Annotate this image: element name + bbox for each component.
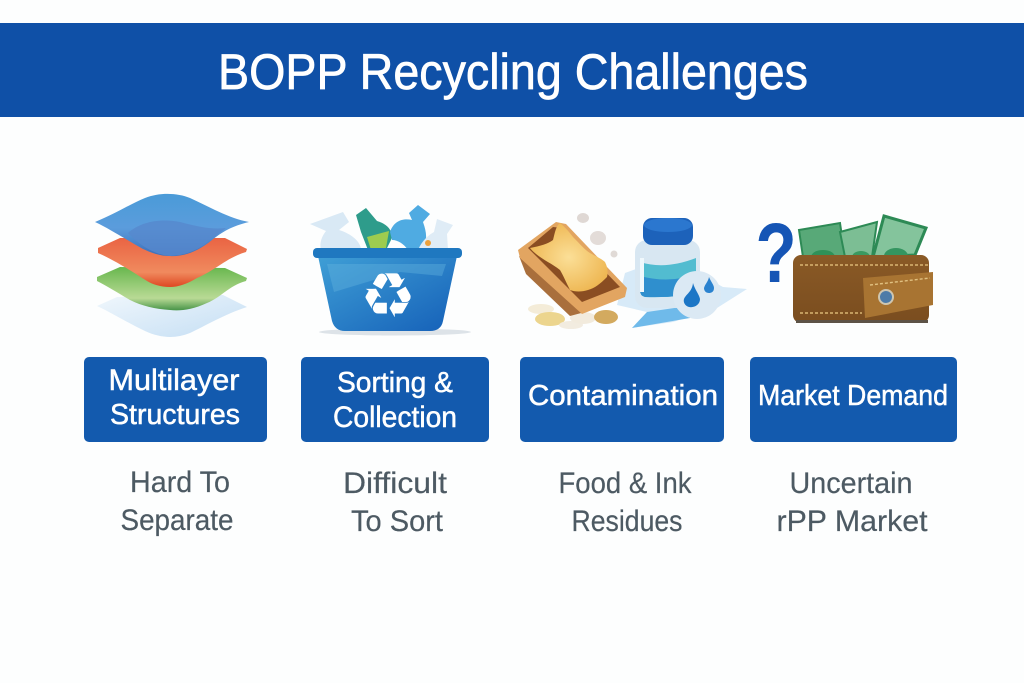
toast side (519, 256, 585, 316)
caption: difficult to sort: To Sort (351, 505, 444, 538)
title banner (0, 23, 1024, 117)
wallet clasp (863, 272, 933, 318)
icon: wallet with cash and question mark (755, 207, 933, 323)
wallet stitching (800, 265, 928, 313)
card: market demand (750, 357, 957, 442)
icon: food residue and ink jar (518, 213, 747, 329)
blue jug (390, 205, 430, 250)
bin shadow (319, 328, 471, 336)
card label: Structures (110, 399, 240, 431)
caption: food and ink residues: Food & Ink (558, 467, 692, 500)
blue splash (617, 262, 747, 328)
question mark: ? (755, 207, 797, 301)
card label: Multilayer (108, 364, 240, 397)
bin body (318, 256, 457, 331)
banknotes (799, 216, 926, 264)
wallet snap (879, 290, 893, 304)
caption: uncertain rPP market: rPP Market (776, 505, 928, 538)
card: multilayer structures (84, 357, 267, 442)
caption: food and ink residues: Residues (572, 505, 682, 538)
toast spread (530, 223, 608, 292)
card label: Market Demand (758, 380, 948, 412)
title: BOPP Recycling Challenges (218, 44, 808, 100)
jar lid (643, 218, 693, 245)
caption: difficult to sort: Difficult (343, 467, 448, 500)
toast burnt layer (528, 227, 620, 302)
card: sorting and collection (301, 357, 489, 442)
card label: Sorting & (337, 367, 453, 399)
chips (528, 304, 554, 314)
card label: Contamination (528, 380, 718, 412)
bin rim (313, 248, 462, 258)
icon: recycling bin with bottles (310, 205, 471, 336)
caption: hard to separate: Separate (120, 504, 234, 537)
card label: Collection (333, 401, 457, 434)
card: contamination (520, 357, 724, 442)
icon: multilayer film stack (95, 194, 249, 337)
caption: hard to separate: Hard To (130, 466, 230, 499)
green bottle (356, 208, 392, 250)
wallet body (793, 255, 929, 323)
bag (310, 212, 361, 250)
crumbs (577, 213, 589, 223)
ink drop badge (673, 271, 721, 319)
toast crust (518, 222, 627, 314)
caption: uncertain rPP market: Uncertain (790, 467, 912, 500)
clear bottle (418, 219, 453, 250)
jar (635, 240, 700, 308)
icon: recycle symbol: ♻ (360, 259, 416, 332)
